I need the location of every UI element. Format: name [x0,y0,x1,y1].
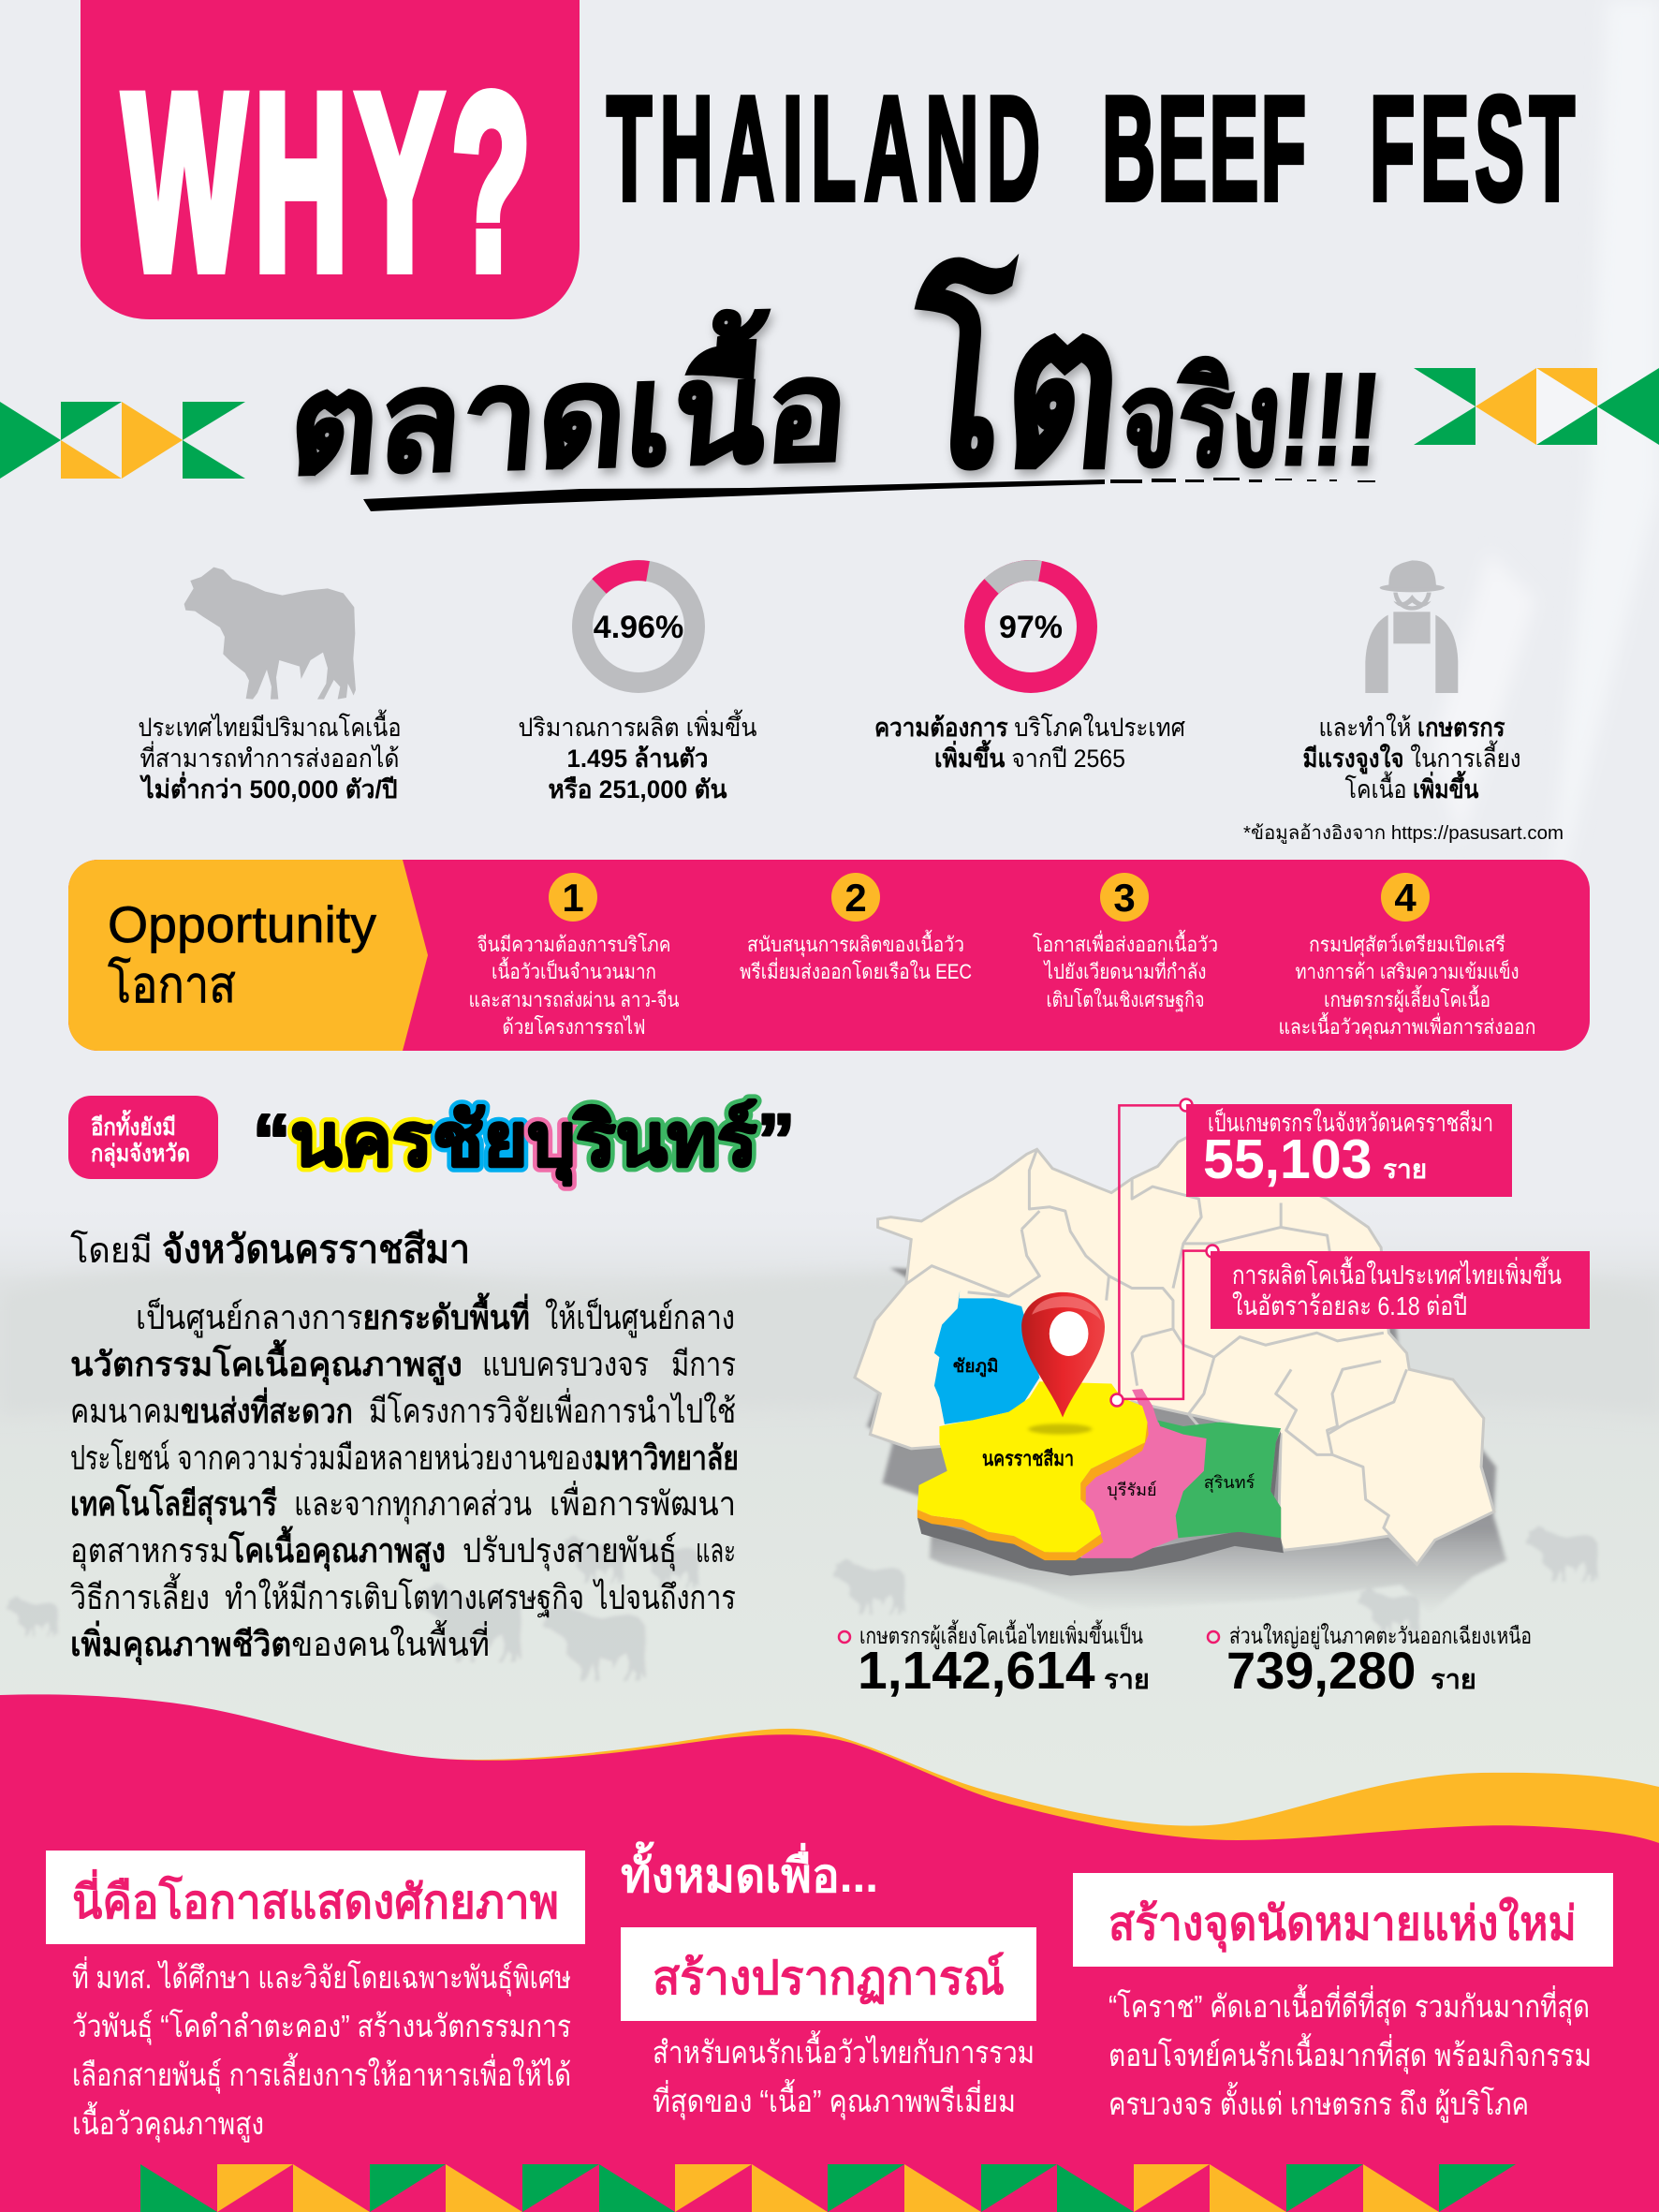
sub heading: โดยมี จังหวัดนครราชสีมา [70,1228,470,1271]
body paragraph: เป็นศูนย์กลางการยกระดับพื้นที่ [136,1292,530,1338]
stat text: ที่สามารถทำการส่งออกได้ [140,741,399,773]
opportunity item 1: และสามารถส่งผ่าน ลาว-จีน [468,988,680,1011]
map: Nakhon Ratchasima extrusion [918,1423,1149,1560]
event title [607,66,1575,231]
opportunity item 2: สนับสนุนการผลิตของเนื้อวัว [747,930,964,957]
donut chart 4.96% [582,570,695,683]
province group heading: “นครชัยบุรินทร์” [253,1099,795,1186]
map labels: สุรินทร์ [1204,1473,1255,1493]
phenomenon body [653,2030,1035,2120]
map labels: ชัยภูมิ [952,1357,999,1378]
stat text: ปริมาณการผลิต เพิ่มขึ้น [519,709,756,742]
stat: production ring [519,570,756,804]
connector dots [1110,1099,1219,1407]
opportunity item 4: และเนื้อวัวคุณภาพเพื่อการส่งออก [1279,1012,1535,1040]
body paragraph: วิธีการเลี้ยง [70,1572,210,1616]
body paragraph: มีโครงการวิจัยเพื่อการนำไปใช้ [369,1388,736,1430]
body paragraph: จากความร่วมมือหลายหน่วยงานของมหาวิทยาลัย [177,1438,739,1477]
stat: total farmers [839,1619,1150,1701]
map: Chaiyaphum [934,1290,1039,1424]
icon: location pin [1021,1292,1105,1435]
body paragraph: คมนาคมขนส่งที่สะดวก [70,1387,353,1430]
opportunity item 4 [1279,873,1535,1040]
opportunity item 4: กรมปศุสัตว์เตรียมเปิดเสรี [1309,933,1505,957]
callout: production growth: ในอัตราร้อยละ 6.18 ต่อปี [1232,1290,1467,1320]
map: Buriram [1080,1389,1207,1558]
opportunity item 3 [1033,873,1218,1012]
panel: new destination [1073,1873,1613,2123]
stat text: เพิ่มขึ้น จากปี 2565 [934,739,1125,773]
map: dark extrusion [918,1430,1284,1576]
bottom triangle pattern [140,2164,1516,2212]
opportunity item 2 [740,873,972,983]
opportunity heading: Opportunity [108,895,376,953]
stat text [1303,713,1520,804]
callout: province farmers [1186,1104,1512,1197]
panel: opportunity [68,860,1590,1051]
stat: domestic demand [874,570,1185,773]
opportunity heading: โอกาส [108,956,236,1013]
stat: total farmers: ราย [1104,1665,1150,1695]
body paragraph: นวัตกรรมโคเนื้อคุณภาพสูง [70,1339,462,1386]
potential body: เนื้อวัวคุณภาพสูง [72,2101,264,2143]
event title: BEEF [1102,66,1306,231]
opportunity item 1: เนื้อวัวเป็นจำนวนมาก [492,957,656,983]
main Thai heading: จริง!!! [1113,346,1387,493]
panel: phenomenon: สร้างปรากฏการณ์ [653,1952,1005,2004]
body paragraph: และจากทุกภาคส่วน [294,1484,532,1525]
main Thai heading [284,256,1387,512]
why panel [81,0,580,320]
map [855,1099,1506,1613]
body paragraph: ไปจนถึงการ [593,1578,736,1616]
right triangle pattern [1414,368,1659,445]
panel: bottom pink wave [0,1694,1659,2212]
body paragraph [70,1292,739,1666]
opportunity item 1: 1 [562,876,584,920]
stat text [519,709,756,804]
body paragraph: เพื่อการพัฒนา [550,1481,736,1523]
body paragraph: เทคโนโลยีสุรนารี [70,1483,278,1526]
icon: farmer [1365,560,1458,693]
opportunity item 3: 3 [1113,876,1136,920]
opportunity item 4: เกษตรกรผู้เลี้ยงโคเนื้อ [1324,985,1490,1012]
opportunity item 1: จีนมีความต้องการบริโภค [477,933,670,956]
map labels: บุรีรัมย์ [1107,1481,1157,1500]
opportunity item 3: โอกาสเพื่อส่งออกเนื้อวัว [1033,930,1218,956]
stat text: ประเทศไทยมีปริมาณโคเนื้อ [139,709,401,742]
body paragraph: ให้เป็นศูนย์กลาง [545,1296,735,1338]
stat text: ความต้องการ บริโภคในประเทศ [874,713,1185,742]
potential body: เลือกสายพันธุ์ การเลี้ยงการให้อาหารเพื่อให้ได้ [72,2053,571,2094]
panel: phenomenon [621,1927,1036,2120]
brush underline [363,478,1375,511]
phenomenon body: สำหรับคนรักเนื้อวัวไทยกับการรวม [653,2030,1035,2070]
destination body: ครบวงจร ตั้งแต่ เกษตรกร ถึง ผู้บริโภค [1108,2082,1529,2123]
icon: cow [184,568,356,700]
callout: province farmers: ราย [1383,1155,1427,1184]
stat text: 1.495 ล้านตัว [567,745,708,773]
opportunity heading [108,895,376,1013]
donut chart 4.96%: 4.96% [594,610,683,645]
body paragraph: ปรับปรุงสายพันธุ์ [462,1531,677,1571]
left triangle pattern [0,402,245,479]
opportunity item 3: ไปยังเวียดนามที่กำลัง [1043,957,1206,983]
body paragraph: แบบครบวงจร [482,1345,649,1383]
stat text [874,713,1185,773]
stat: cattle export [139,568,401,804]
event title: FEST [1370,66,1575,231]
why heading: WHY? [124,43,531,320]
event title: THAILAND [607,66,1040,231]
stat: total farmers: 1,142,614 [858,1641,1095,1701]
donut chart 97%: 97% [999,610,1063,645]
callout: production growth: การผลิตโคเนื้อในประเทศไทยเพิ่มขึ้น [1232,1256,1562,1290]
opportunity item 2: พรีเมี่ยมส่งออกโดยเรือใน EEC [740,957,972,983]
potential body: วัวพันธุ์ “โคดำลำตะคอง” สร้างนวัตกรรมการ [72,2009,571,2045]
panel: potential: นี่คือโอกาสแสดงศักยภาพ [72,1869,559,1928]
donut chart 97% [975,570,1087,683]
stat text: หรือ 251,000 ตัน [549,775,727,804]
destination body [1108,1984,1592,2123]
province group badge: กลุ่มจังหวัด [91,1141,190,1169]
stat: farmers [1303,560,1520,804]
main Thai heading: โต [898,256,1132,512]
opportunity item 2: 2 [844,876,867,920]
stat text: โคเนื้อ เพิ่มขึ้น [1344,770,1479,804]
map province borders [906,1149,1417,1564]
phenomenon body: ที่สุดของ “เนื้อ” คุณภาพพรีเมี่ยม [653,2079,1016,2120]
stat: total farmers: เกษตรกรผู้เลี้ยงโคเนื้อไทยเพิ่มขึ้นเป็น [859,1619,1143,1650]
province group badge [68,1096,218,1179]
body paragraph: มีการ [671,1345,736,1383]
stat text [139,709,401,804]
map base [855,1138,1494,1564]
body paragraph: ทำให้มีการเติบโตทางเศรษฐกิจ [225,1578,584,1618]
body paragraph: เพิ่มคุณภาพชีวิตของคนในพื้นที่ [70,1619,490,1666]
body paragraph: ประโยชน์ [70,1438,169,1477]
map: Surin [1158,1420,1281,1538]
opportunity item 1: ด้วยโครงการรถไฟ [502,1015,646,1039]
stat: northeast farmers: ส่วนใหญ่อยู่ในภาคตะวันออกเฉียงเหนือ [1229,1623,1532,1650]
panel: potential [46,1851,585,2143]
callout: province farmers: 55,103 [1203,1128,1372,1190]
potential body: ที่ มทส. ได้ศึกษา และวิจัยโดยเฉพาะพันธุ์พิเศษ [72,1956,571,1997]
opportunity item 1 [468,873,680,1039]
wave: orange [391,1729,1659,1873]
callout: production growth [1211,1251,1590,1329]
main Thai heading: ตลาดเนื้อ [284,306,857,503]
body paragraph: และ [696,1531,736,1570]
stat: northeast farmers: ราย [1431,1665,1476,1695]
potential body [72,1956,571,2143]
stat text: ไม่ต่ำกว่า 500,000 ตัว/ปี [139,771,398,804]
opportunity item 4: ทางการค้า เสริมความเข้มแข็ง [1296,958,1519,983]
province group heading: “นครชัยบุรินทร์” [253,1099,795,1186]
stat: northeast farmers [1208,1623,1532,1700]
stat: northeast farmers: 739,280 [1226,1641,1416,1700]
opportunity item 4: 4 [1394,876,1417,920]
map labels [952,1357,1255,1500]
all of this for heading: ทั้งหมดเพื่อ... [621,1841,878,1902]
stat text: มีแรงจูงใจ ในการเลี้ยง [1303,740,1520,774]
map: Nakhon Ratchasima [918,1381,1148,1552]
panel: new destination: สร้างจุดนัดหมายแห่งใหม่ [1108,1896,1577,1953]
source note: *ข้อมูลอ้างอิงจาก https://pasusart.com [1243,823,1564,845]
callout: province farmers: เป็นเกษตรกรในจังหวัดนครราชสีมา [1208,1106,1493,1137]
body paragraph: อุตสาหกรรมโคเนื้อคุณภาพสูง [70,1526,446,1572]
map shadow [867,1190,1506,1613]
opportunity item 3: เติบโตในเชิงเศรษฐกิจ [1047,988,1204,1012]
map connector lines [1119,1105,1212,1400]
map labels: นครราชสีมา [982,1447,1074,1470]
stat text: และทำให้ เกษตรกร [1318,713,1505,742]
province group badge: อีกทั้งยังมี [91,1109,176,1141]
